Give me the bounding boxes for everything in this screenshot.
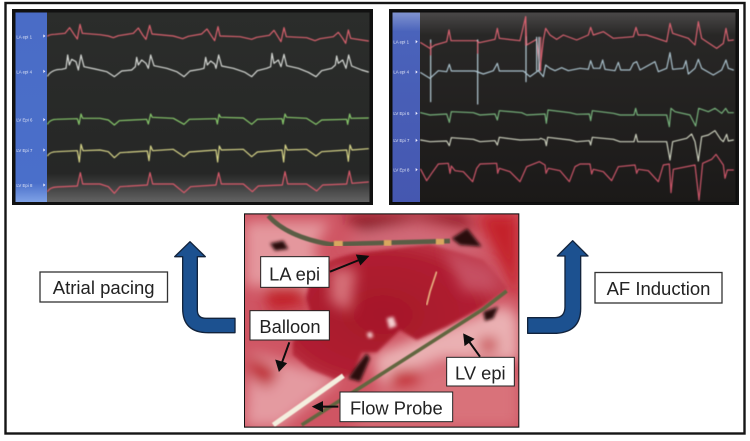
- lower LV epi catheter: [302, 291, 507, 425]
- trace: LA epi 1: [421, 17, 733, 70]
- channel labels: left monitor: LV Epi 7: [16, 148, 33, 153]
- label: Atrial pacing: Atrial pacing: [53, 277, 155, 298]
- channel labels: left monitor: [16, 34, 45, 188]
- arrow: atrial pacing up arrow: [175, 242, 235, 333]
- label: Atrial pacing: [40, 272, 168, 302]
- arrow: AF induction up arrow: [528, 241, 588, 333]
- panel: AF induction ECG monitor: [390, 10, 738, 204]
- trace: LV Epi 7: [48, 144, 368, 162]
- channel labels: right monitor: LV Epi 7: [393, 138, 410, 143]
- label: LA epi: [261, 257, 329, 287]
- label: Balloon: Balloon: [259, 316, 321, 337]
- arrow: LA epi pointer: [330, 256, 367, 272]
- tissue background: [245, 214, 518, 427]
- arrow: Flow Probe pointer: [314, 403, 338, 411]
- channel labels: right monitor: LA epi 1: [393, 39, 410, 44]
- channel labels: left monitor: LV Epi 8: [16, 183, 33, 188]
- channel labels: right monitor: LV Epi 6: [393, 111, 410, 116]
- trace: LA epi 1: [48, 24, 368, 43]
- channel labels: right monitor: [393, 39, 418, 172]
- label: AF Induction: [595, 272, 722, 303]
- label: Flow Probe: Flow Probe: [350, 397, 443, 418]
- panel: atrial pacing ECG monitor: [13, 10, 372, 204]
- channel labels: left monitor: LA epi 1: [16, 34, 33, 39]
- trace: LV Epi 8: [421, 154, 733, 200]
- trace: LV Epi 7: [421, 131, 733, 161]
- channel labels: right monitor: LA epi 4: [393, 70, 410, 75]
- trace: LV Epi 6: [48, 114, 368, 125]
- pacing spikes: [431, 37, 539, 104]
- trace: LV Epi 6: [421, 108, 733, 127]
- upper LA epi catheter: [268, 216, 450, 244]
- channel labels: right monitor: LV Epi 8: [393, 167, 410, 172]
- trace: LV Epi 8: [48, 171, 368, 193]
- label: LA epi: LA epi: [269, 263, 320, 284]
- trace: LA epi 4: [48, 53, 368, 77]
- arrow: LV epi pointer: [464, 335, 480, 357]
- label: LV epi: [447, 357, 514, 386]
- channel labels: left monitor: LA epi 4: [16, 69, 33, 74]
- heart: [293, 244, 508, 380]
- label: Balloon: [250, 311, 329, 340]
- trace: LA epi 4: [421, 53, 733, 78]
- label: AF Induction: AF Induction: [607, 278, 710, 299]
- arrow: Balloon pointer: [277, 342, 289, 370]
- panel: surgical photo of heart: [244, 213, 519, 428]
- channel labels: left monitor: LV Epi 6: [16, 118, 33, 123]
- label: LV epi: LV epi: [455, 363, 506, 384]
- label: Flow Probe: [340, 392, 453, 422]
- white flow probe: [273, 376, 343, 425]
